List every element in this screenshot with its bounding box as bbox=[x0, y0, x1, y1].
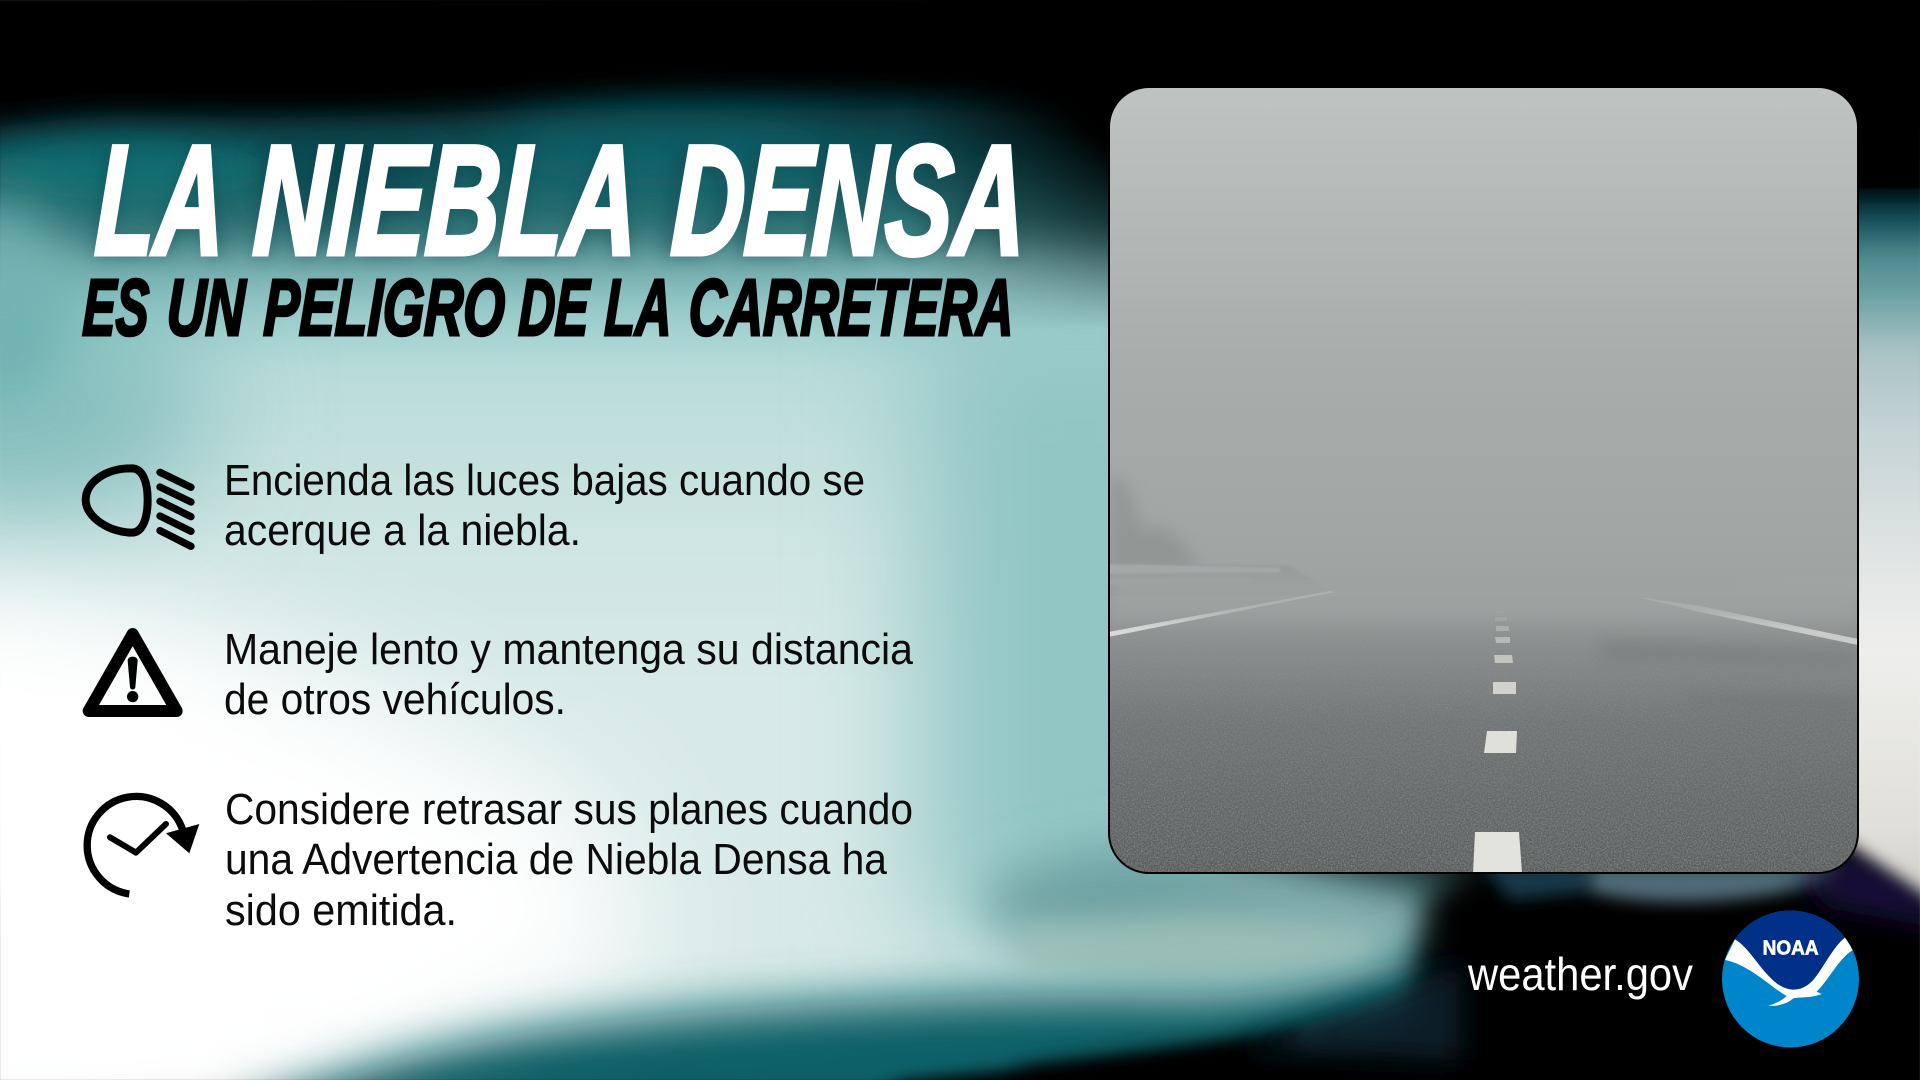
text: tip 3 bbox=[225, 785, 913, 935]
text: tip 2 bbox=[224, 625, 913, 724]
subtitle: ES bbox=[81, 263, 151, 352]
tip 2: drive slowly bbox=[89, 625, 913, 724]
weather.gov url: weather.gov bbox=[1467, 948, 1693, 1000]
icon: headlight low beam bbox=[86, 468, 191, 546]
text: tip 1: Encienda las luces bajas cuando se bbox=[224, 456, 865, 505]
photo trees in fog bbox=[1110, 482, 1192, 564]
photo centre dashes bbox=[1473, 611, 1522, 873]
heading: la niebla densa bbox=[93, 114, 1030, 288]
icon: clock with arrow bbox=[87, 796, 199, 894]
photo road shading bbox=[1608, 644, 1842, 660]
heading: la niebla densa: DENSA bbox=[669, 114, 1030, 288]
photo: foggy road bbox=[1108, 87, 1858, 876]
photo sky bbox=[1109, 87, 1858, 617]
title bbox=[92, 114, 1030, 290]
icon: warning triangle bbox=[89, 634, 177, 711]
subtitle: DE bbox=[517, 263, 592, 352]
logo wordmark: NOAA bbox=[1763, 936, 1819, 959]
heading: la niebla densa: LA bbox=[93, 114, 229, 288]
text: tip 2: Maneje lento y mantenga su distancia bbox=[224, 625, 913, 674]
tip 1: low beams bbox=[86, 456, 865, 555]
subtitle: PELIGRO bbox=[262, 263, 507, 352]
text: tip 2: de otros vehículos. bbox=[224, 675, 566, 724]
photo guardrails bbox=[1110, 564, 1202, 573]
text: tip 3: Considere retrasar sus planes cuando bbox=[225, 785, 913, 834]
tip 3: delay plans bbox=[87, 785, 913, 935]
logo white bird bbox=[1725, 938, 1853, 1006]
subtitle: LA bbox=[603, 263, 674, 352]
NOAA logo bbox=[1720, 907, 1863, 1048]
logo upper dark blue bbox=[1734, 910, 1845, 990]
text: tip 3: una Advertencia de Niebla Densa ha bbox=[225, 835, 887, 884]
photo border bbox=[1109, 87, 1858, 873]
text: tip 3: sido emitida. bbox=[225, 886, 457, 935]
heading: la niebla densa: NIEBLA bbox=[251, 114, 642, 288]
photo road edge lines bbox=[1108, 591, 1335, 637]
text: tip 1 bbox=[224, 456, 865, 555]
text: tip 1: acerque a la niebla. bbox=[224, 506, 581, 555]
photo horizon haze bbox=[1124, 586, 1791, 627]
subtitle: UN bbox=[165, 263, 248, 352]
subtitle bbox=[81, 263, 1016, 352]
photo road surface bbox=[1109, 596, 1858, 876]
subtitle: CARRETERA bbox=[687, 263, 1016, 352]
title shadow: LA NIEBLA DENSA bbox=[92, 116, 1022, 290]
